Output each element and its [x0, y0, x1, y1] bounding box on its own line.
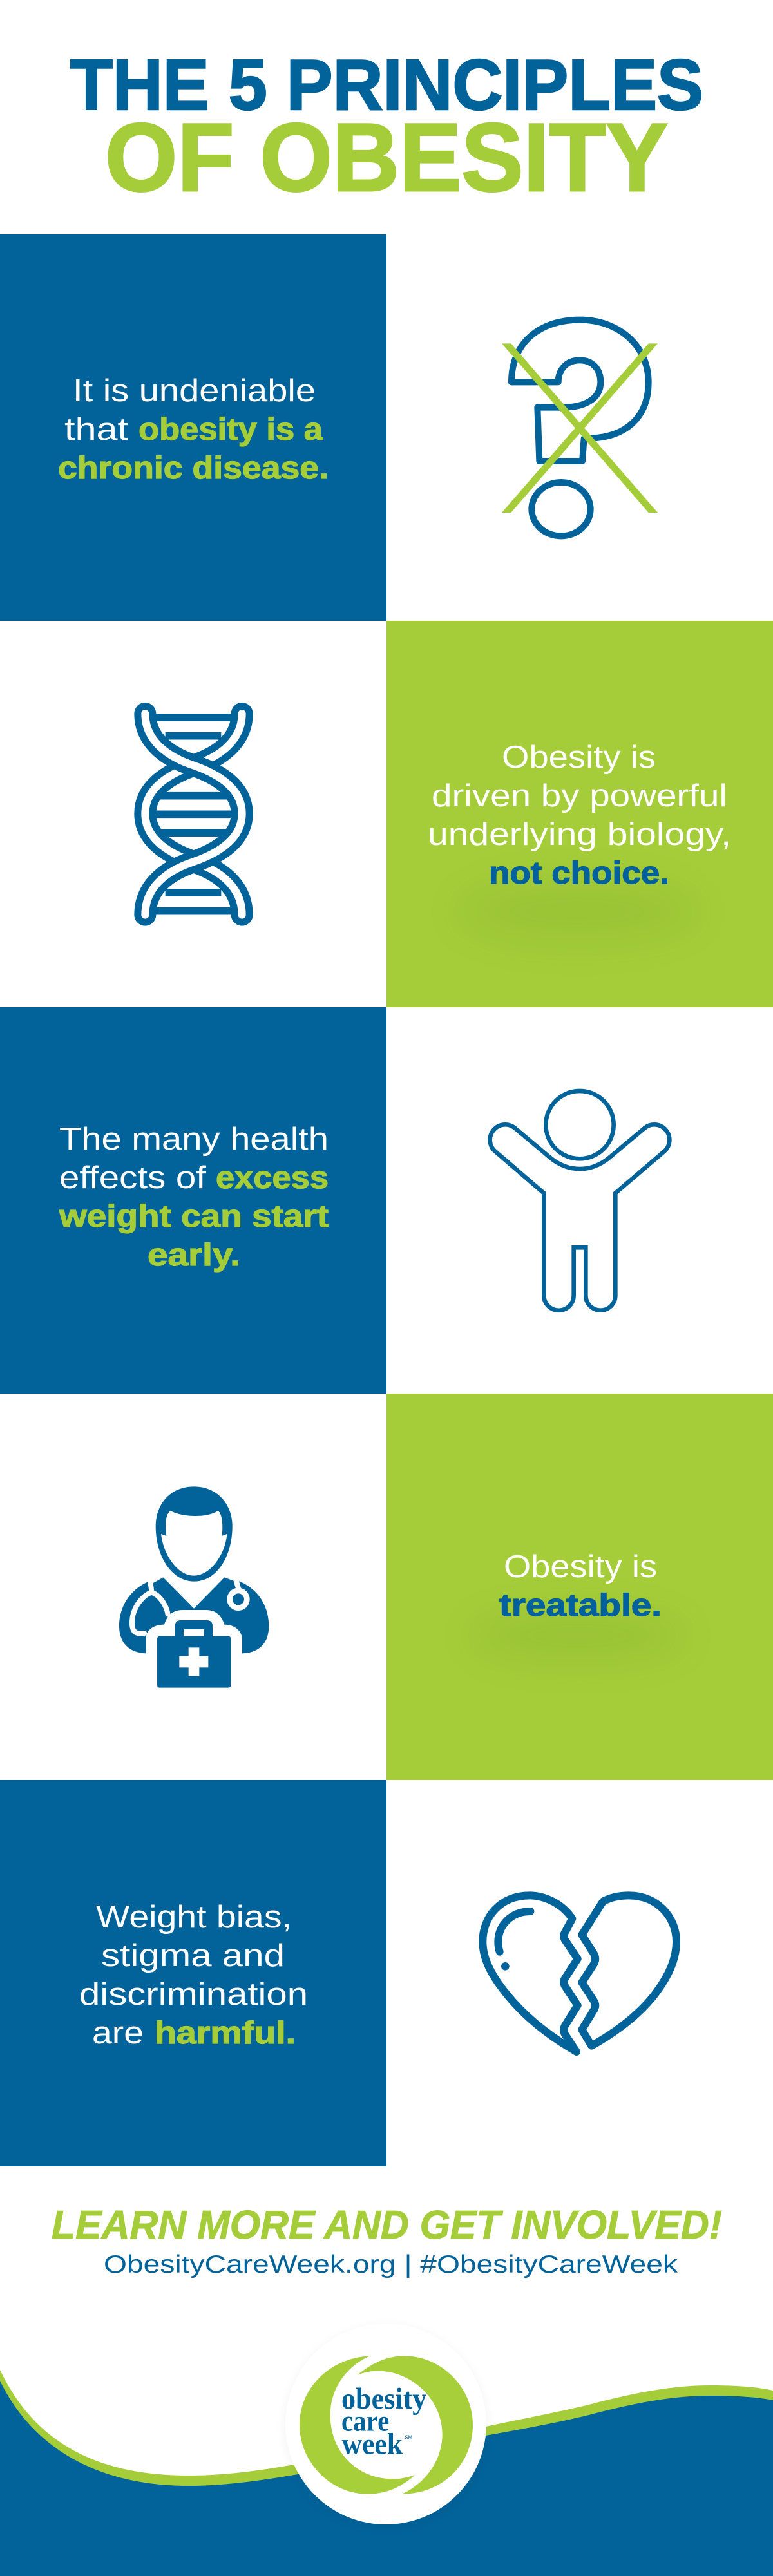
line: that: that — [64, 412, 128, 447]
line: not choice.: not choice. — [489, 856, 669, 891]
line: obesity is a: obesity is a — [138, 412, 323, 447]
line: excess: excess — [216, 1160, 329, 1195]
title line 2: OF OBESITY — [105, 103, 668, 211]
wordmark: week: week — [342, 2428, 403, 2461]
wordmark: care: care — [341, 2404, 389, 2438]
line: harmful.: harmful. — [155, 2016, 296, 2050]
wordmark: obesity: obesity — [341, 2382, 426, 2416]
line: It is undeniable: It is undeniable — [73, 374, 316, 408]
line: weight can start: weight can start — [59, 1199, 329, 1234]
icon: child with raised arms — [490, 1091, 669, 1311]
icon: DNA helix — [145, 714, 242, 915]
line: Obesity is: Obesity is — [502, 740, 656, 775]
line: discrimination: discrimination — [79, 1977, 308, 2012]
footer links: ObesityCareWeek.org | #ObesityCareWeek — [104, 2251, 678, 2278]
service mark: SM — [405, 2435, 412, 2441]
line: early.: early. — [148, 1238, 240, 1273]
line: Weight bias,: Weight bias, — [96, 1900, 292, 1935]
panel: weight bias text — [0, 1780, 386, 2166]
title line 1: THE 5 PRINCIPLES — [70, 45, 703, 125]
panel: chronic disease text — [0, 234, 386, 621]
footer call to action: LEARN MORE AND GET INVOLVED! — [52, 2203, 722, 2248]
line: driven by powerful: driven by powerful — [432, 779, 727, 813]
panel: health effects text — [0, 1007, 386, 1394]
line: effects of: effects of — [59, 1160, 206, 1195]
line: stigma and: stigma and — [101, 1938, 285, 1973]
line: are: are — [92, 2016, 144, 2050]
footer wave — [0, 2370, 773, 2576]
icon: doctor with medical bag — [119, 1486, 269, 1688]
line: Obesity is: Obesity is — [504, 1549, 657, 1584]
icon: broken heart — [482, 1895, 676, 2052]
logo mark and wordmark — [300, 2356, 473, 2494]
logo: obesity care week — [285, 2324, 486, 2527]
panel: biology text — [386, 621, 773, 1007]
icon: crossed out question mark — [502, 320, 658, 536]
line: The many health: The many health — [59, 1122, 329, 1157]
line: underlying biology,: underlying biology, — [428, 817, 731, 852]
line: treatable.: treatable. — [499, 1588, 662, 1623]
line: chronic disease.: chronic disease. — [58, 451, 329, 486]
title — [70, 45, 703, 211]
panel: treatable text — [386, 1394, 773, 1780]
